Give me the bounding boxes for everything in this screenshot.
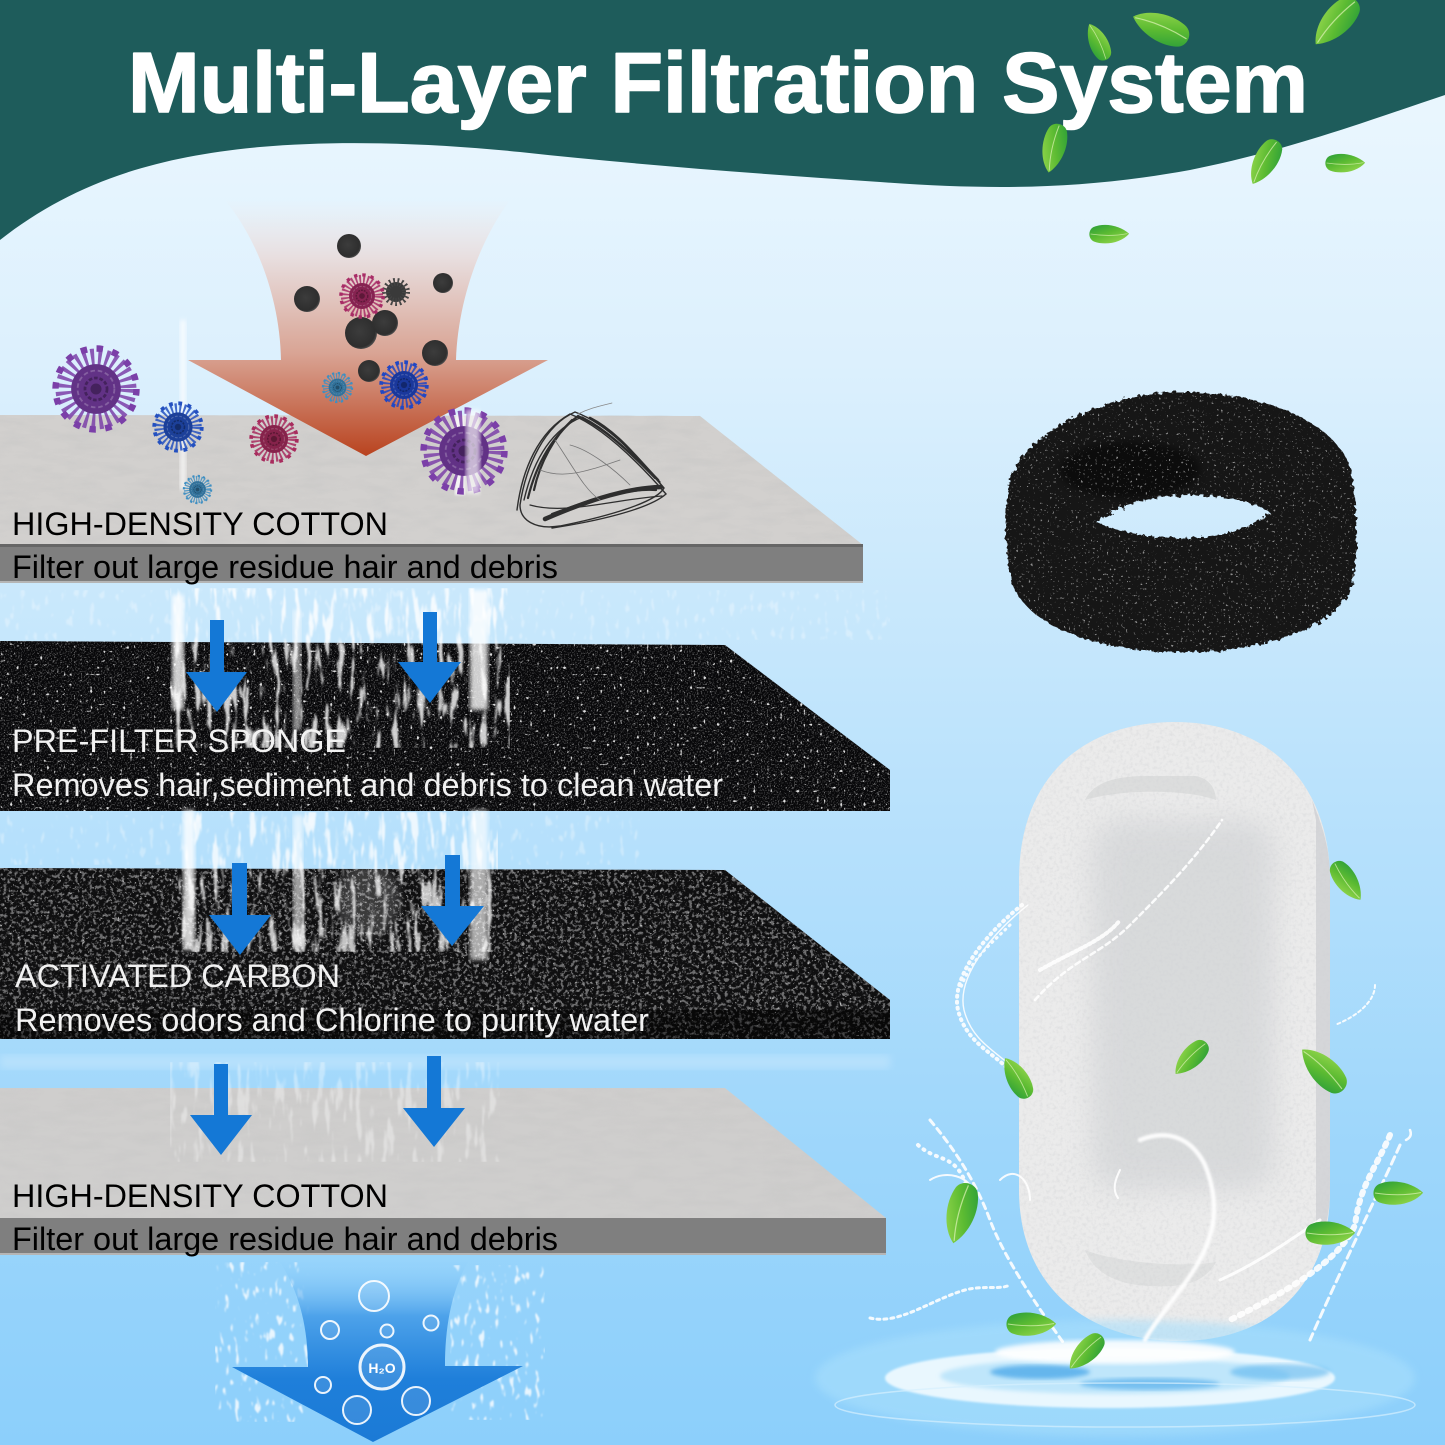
pad recess [1018, 722, 1330, 1342]
label: activated carbon [15, 958, 649, 1038]
label: activated carbon: ACTIVATED CARBON [15, 958, 340, 994]
layer 1: high-density cotton [0, 415, 863, 583]
pad bottom dimple [1085, 1250, 1216, 1286]
pad body [1019, 722, 1330, 1341]
arrow pair, carbon layer [209, 855, 484, 955]
ring texture [1000, 385, 1365, 660]
layer 3: activated carbon [0, 868, 890, 1039]
title: Multi-Layer Filtration System [128, 36, 1308, 131]
pad top dimple [1085, 776, 1216, 800]
label: pre-filter sponge: PRE-FILTER SPONGE [12, 723, 346, 759]
arrow shape [188, 200, 548, 456]
ring shadow under hole [1060, 442, 1200, 498]
downward blue arrows [186, 612, 484, 1155]
H2O label: H₂O [368, 1360, 396, 1376]
arrow pair, lower cotton layer [190, 1056, 465, 1155]
label: pre-filter sponge [12, 723, 723, 803]
label: cotton 2: Filter out large residue hair and debris [12, 1221, 558, 1257]
pool [815, 1320, 1415, 1436]
splash droplets [870, 820, 1411, 1345]
header wave band [0, 0, 1445, 240]
falling water streams [0, 320, 890, 1162]
arrow pair, sponge layer [186, 612, 461, 712]
dark particles [294, 234, 453, 382]
layer 2: pre-filter sponge [0, 641, 890, 811]
blue clean-water arrow [215, 1262, 545, 1442]
icon: hair clump [517, 403, 666, 528]
label: activated carbon: Removes odors and Chlorine to purity water [15, 1002, 649, 1038]
layer 4: high-density cotton [0, 1088, 886, 1255]
water splash and pool [815, 820, 1415, 1436]
pad right edge shading [1312, 800, 1330, 1240]
ring body [1006, 392, 1357, 652]
label: cotton 1: Filter out large residue hair and debris [12, 549, 558, 585]
pad texture [1018, 722, 1330, 1342]
spiky particle [386, 282, 406, 302]
label: cotton 2 [12, 1178, 558, 1257]
label: pre-filter sponge: Removes hair,sediment and debris to clean water [12, 767, 723, 803]
label: cotton 2: HIGH-DENSITY COTTON [12, 1178, 388, 1214]
floating green leaves [936, 0, 1424, 1375]
bubbles [315, 1281, 438, 1424]
red arrow with contaminants [188, 200, 548, 456]
product: white fibre filter pad [1018, 722, 1330, 1342]
label: cotton 1: HIGH-DENSITY COTTON [12, 506, 388, 542]
product: black sponge ring [1000, 385, 1365, 660]
label: cotton 1 [12, 506, 558, 585]
arrow shape [232, 1262, 523, 1442]
virus cluster in arrow [323, 275, 427, 408]
spray droplets [215, 1262, 545, 1422]
viruses on cotton [56, 349, 504, 503]
layer labels [12, 506, 723, 1257]
